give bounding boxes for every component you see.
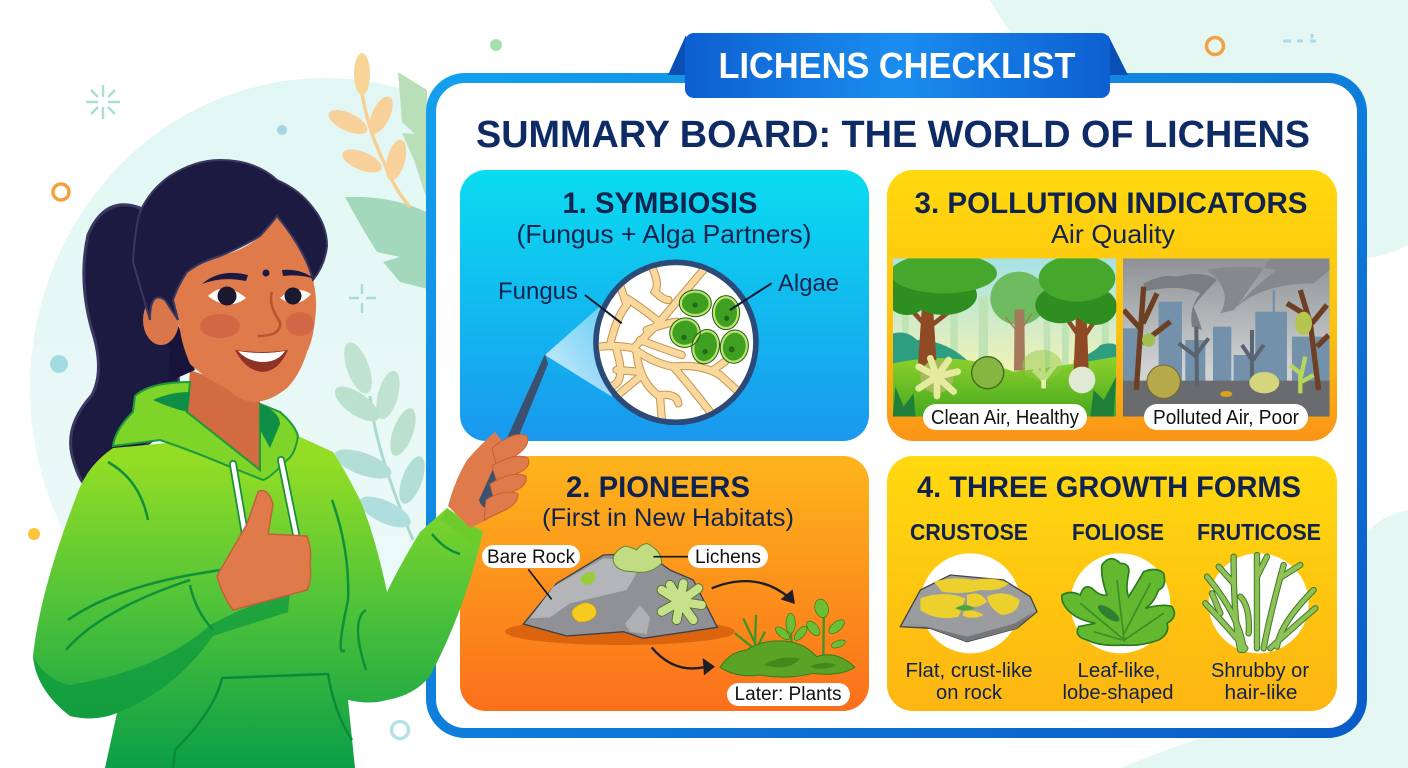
form: crustose — [900, 519, 1037, 704]
nose — [258, 292, 280, 336]
hood — [113, 382, 298, 480]
panel: pollution indicators: Air Quality — [1051, 219, 1175, 249]
cheeks — [200, 312, 314, 338]
drawstrings — [233, 460, 296, 534]
arm shadow — [33, 590, 290, 718]
scenes — [884, 253, 1330, 417]
label: bare rock: Bare Rock — [487, 547, 575, 568]
label: clean air: Clean Air, Healthy — [931, 407, 1079, 429]
banner: LICHENS CHECKLIST — [718, 45, 1076, 86]
mouth — [235, 350, 288, 372]
ear — [143, 295, 179, 345]
sleeve lines — [66, 462, 460, 670]
banner — [668, 33, 1128, 98]
hair back — [150, 290, 195, 382]
label: lichens: Lichens — [695, 547, 761, 568]
polluted air scene — [1123, 258, 1330, 417]
form: fruticose: FRUTICOSE — [1197, 519, 1321, 545]
panel: pollution indicators — [884, 170, 1337, 441]
pocket — [173, 674, 352, 768]
eyebrows and bindi — [202, 270, 315, 284]
ponytail — [71, 205, 180, 488]
pointer stick — [479, 354, 548, 508]
thumbs-up hand — [217, 490, 311, 610]
panel: growth forms: 4. THREE GROWTH FORMS — [917, 471, 1301, 504]
panel: symbiosis — [460, 170, 869, 441]
neck — [187, 370, 260, 470]
panel: pioneers: (First in New Habitats) — [542, 504, 794, 532]
panel: pollution indicators: 3. POLLUTION INDICATORS — [914, 187, 1308, 220]
presenter character — [33, 160, 548, 768]
board title: SUMMARY BOARD: THE WORLD OF LICHENS — [476, 114, 1310, 156]
form: fruticose: Shrubby or — [1211, 659, 1309, 682]
form: fruticose: hair-like — [1224, 681, 1298, 704]
board — [431, 33, 1362, 733]
panel: pioneers — [460, 456, 869, 711]
form: crustose: Flat, crust-like — [906, 659, 1032, 682]
form: crustose: on rock — [936, 681, 1003, 704]
form: foliose: lobe-shaped — [1062, 681, 1174, 704]
label: fungus: Fungus — [498, 278, 578, 305]
form: fruticose — [1197, 519, 1321, 704]
label: polluted air: Polluted Air, Poor — [1153, 407, 1299, 429]
clean air scene — [884, 253, 1117, 417]
panel: symbiosis: 1. SYMBIOSIS — [562, 187, 758, 220]
hood inner lining — [153, 392, 280, 448]
microscope view — [545, 262, 772, 422]
panel: growth forms — [887, 456, 1337, 711]
hoodie body and pointing arm — [33, 436, 483, 768]
pointing palm — [448, 432, 505, 528]
face — [173, 216, 316, 402]
eyes — [208, 286, 311, 306]
panel: pioneers: 2. PIONEERS — [566, 471, 750, 504]
form: foliose — [1062, 519, 1174, 704]
hair front — [133, 160, 327, 320]
pointing fingers — [484, 434, 529, 520]
form: crustose: CRUSTOSE — [910, 519, 1028, 545]
pointing cuff — [440, 508, 483, 545]
panel: symbiosis: (Fungus + Alga Partners) — [516, 219, 812, 249]
label: later plants: Later: Plants — [734, 684, 842, 705]
form: foliose: Leaf-like, — [1078, 659, 1160, 682]
label: algae: Algae — [778, 270, 839, 297]
decorative plants behind presenter — [325, 53, 432, 540]
form: foliose: FOLIOSE — [1072, 519, 1164, 545]
rock scene with lichens and plants — [505, 543, 855, 677]
